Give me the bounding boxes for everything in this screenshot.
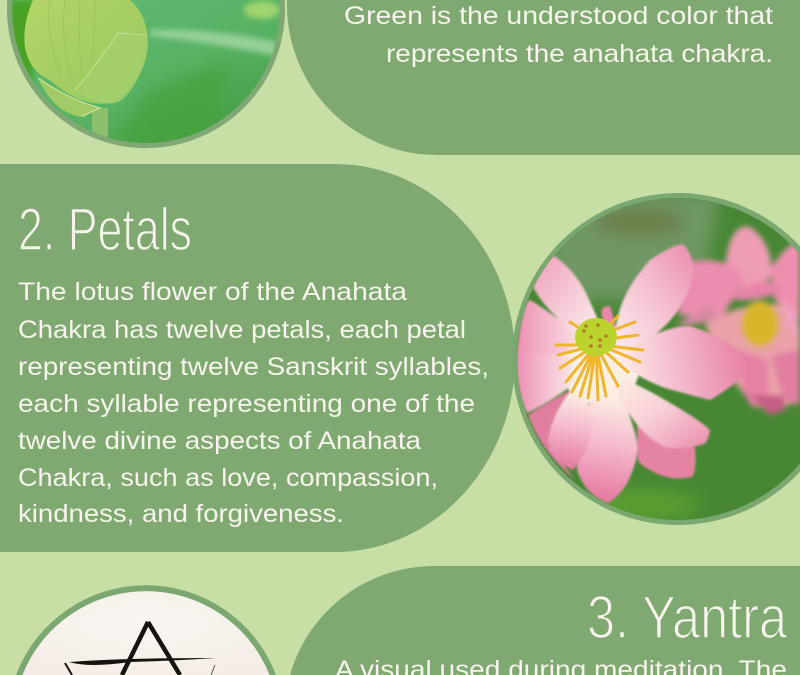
text: colour description: represents the anahata chakra. (386, 40, 773, 68)
text: petals description: Chakra has twelve petals, each petal (18, 316, 466, 344)
text: petals description: twelve divine aspects of Anahata (18, 427, 421, 455)
back flower (675, 226, 800, 415)
stamens (556, 316, 643, 400)
front flower petals (517, 245, 750, 503)
panel: petals (0, 164, 515, 552)
heading: 2. Petals: 2. Petals (18, 196, 192, 263)
text: petals description: representing twelve Sanskrit syllables, (18, 353, 489, 381)
text: petals description: each syllable representing one of the (18, 390, 475, 418)
panel: colour (287, 0, 800, 155)
text: petals description: kindness, and forgiveness. (18, 500, 344, 528)
text: petals description (18, 278, 489, 528)
text: colour description: Green is the understood color that (344, 2, 773, 30)
photo: pink lotus flower (512, 193, 800, 525)
photo: yantra star (16, 585, 276, 675)
text: petals description: Chakra, such as love, compassion, (18, 464, 438, 492)
panel: yantra (290, 566, 800, 675)
text: colour description (344, 2, 773, 68)
photo: green lotus bud (0, 0, 290, 150)
seed pod (575, 318, 617, 356)
text: petals description: The lotus flower of the Anahata (18, 278, 407, 306)
